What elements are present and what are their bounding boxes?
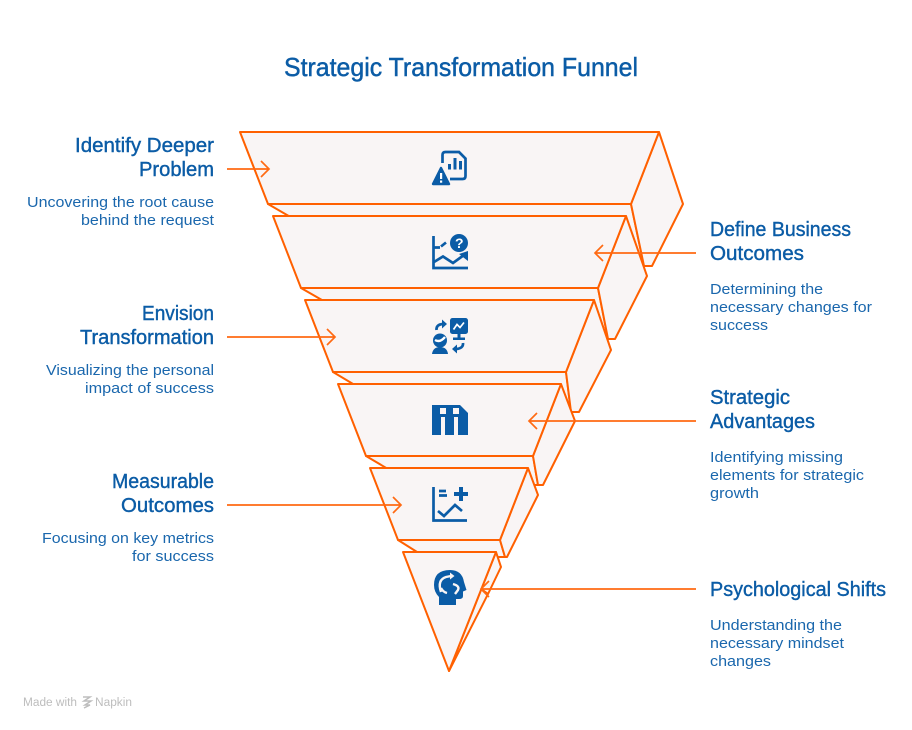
- arrow: identify deeper problem: [227, 161, 269, 177]
- arrow: psychological shifts: [481, 581, 696, 597]
- label: envision transformation: Visualizing the personal: [46, 362, 214, 379]
- label: strategic advantages: Strategic: [710, 386, 790, 409]
- segment 4: [338, 384, 575, 485]
- label: define business outcomes: Determining the: [710, 281, 823, 298]
- label: psychological shifts: Understanding the: [710, 617, 842, 634]
- segment 6: [403, 552, 501, 671]
- label: strategic advantages: [710, 386, 865, 502]
- label: identify deeper problem: Problem: [139, 158, 214, 181]
- label: psychological shifts: changes: [710, 653, 771, 670]
- label: strategic advantages: growth: [710, 485, 759, 502]
- footer: made with napkin: Napkin: [95, 697, 132, 709]
- arrow: envision transformation: [227, 329, 335, 345]
- funnel: [240, 132, 683, 671]
- title: Strategic Transformation Funnel: [284, 52, 638, 82]
- arrow: define business outcomes: [595, 245, 696, 261]
- label: envision transformation: Envision: [142, 302, 214, 325]
- label: identify deeper problem: [27, 134, 215, 229]
- arrow: strategic advantages: [529, 413, 696, 429]
- label: measurable outcomes: Focusing on key metrics: [42, 530, 214, 547]
- segment 2: [273, 216, 647, 339]
- label: psychological shifts: Psychological Shifts: [710, 578, 886, 601]
- segment 3: [305, 300, 611, 412]
- label: envision transformation: Transformation: [80, 326, 214, 349]
- label: define business outcomes: success: [710, 317, 768, 334]
- footer: made with napkin: Made with: [23, 697, 77, 709]
- label: measurable outcomes: [42, 470, 214, 565]
- arrow: measurable outcomes: [227, 497, 401, 513]
- icon: head with arrows: [434, 570, 466, 605]
- label: identify deeper problem: behind the request: [81, 212, 215, 229]
- label: strategic advantages: Identifying missing: [710, 449, 843, 466]
- label: strategic advantages: elements for strategic: [710, 467, 865, 484]
- icon: chart with plus: [434, 487, 468, 520]
- segment 5: [370, 468, 538, 557]
- label: measurable outcomes: for success: [132, 548, 214, 565]
- label: define business outcomes: Define Business: [710, 218, 851, 241]
- label: identify deeper problem: Identify Deeper: [75, 134, 214, 157]
- label: define business outcomes: necessary changes for: [710, 299, 872, 316]
- icon: person and vision board: [432, 318, 468, 354]
- label: identify deeper problem: Uncovering the root cause: [27, 194, 214, 211]
- icon: chart with question: [434, 234, 468, 268]
- segment 1: [240, 132, 683, 266]
- footer: made with napkin: [23, 697, 132, 709]
- icon: columns block: [432, 405, 468, 435]
- label: psychological shifts: necessary mindset: [710, 635, 845, 652]
- label: define business outcomes: Outcomes: [710, 242, 804, 265]
- icon: report with warning: [433, 152, 466, 184]
- label: strategic advantages: Advantages: [710, 410, 815, 433]
- label: envision transformation: impact of success: [85, 380, 214, 397]
- label: psychological shifts: [710, 578, 886, 670]
- label: measurable outcomes: Outcomes: [121, 494, 214, 517]
- label: measurable outcomes: Measurable: [112, 470, 214, 493]
- icon: chart with question: ?: [455, 235, 464, 251]
- label: envision transformation: [46, 302, 214, 397]
- label: define business outcomes: [710, 218, 872, 334]
